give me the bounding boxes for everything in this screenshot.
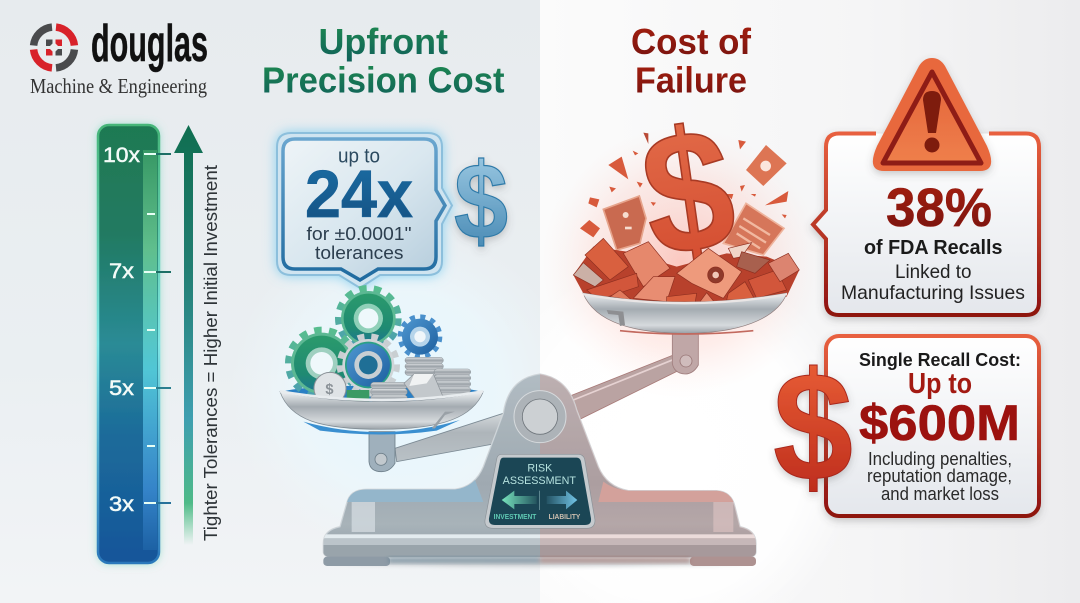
flying shards (580, 133, 788, 237)
illustration: shattered dollar and rubble (573, 90, 799, 307)
pivot knob (514, 391, 566, 443)
cracked dollar sign: $ (631, 90, 745, 294)
callout: up to 24x: 24x (305, 157, 413, 232)
heading: Upfront Precision Cost (262, 21, 505, 100)
gear: green top (339, 289, 398, 348)
heading: Upfront Precision Cost: Upfront (318, 21, 448, 62)
rubble pile (573, 238, 799, 307)
label: 3x: 3x (109, 493, 135, 516)
callout: 38% of FDA recalls: Manufacturing Issues (841, 282, 1025, 304)
logo: Douglas Machine & Engineering (30, 15, 208, 98)
callout: 38% of FDA recalls (813, 134, 1039, 315)
plaque: risk assessment (485, 454, 595, 528)
label: 5x: 5x (109, 377, 135, 400)
callout: single recall cost: Up to (908, 368, 972, 400)
logo wordmark: douglas (91, 15, 208, 73)
callout: up to 24x: tolerances (315, 242, 404, 263)
coin stacks and ingot: $ (325, 382, 333, 398)
callout: single recall cost: $600M (859, 395, 1020, 451)
icon: blue dollar sign: $ (454, 140, 508, 261)
callout: single recall cost: Including penalties, (868, 449, 1012, 469)
arrow: rising investment (174, 125, 203, 545)
callout: up to 24x: up to (338, 144, 380, 168)
plaque: risk assessment: LIABILITY (549, 514, 581, 521)
icon: logo ring (34, 27, 74, 68)
right pan stem (672, 333, 698, 374)
back document right (723, 203, 784, 255)
machine base and fulcrum (323, 374, 756, 557)
right pan (583, 293, 787, 334)
icon: warning triangle (873, 58, 991, 171)
heading: Upfront Precision Cost: Precision Cost (262, 60, 505, 100)
machine feet (323, 557, 756, 566)
callout: single recall cost: Single Recall Cost: (859, 350, 1021, 370)
scale: balance machine (280, 289, 757, 567)
gear: green large (289, 331, 354, 396)
gear: silver with blue core (340, 337, 396, 393)
plaque: risk assessment: RISK (527, 463, 552, 475)
callout: 38% of FDA recalls: 38% (886, 178, 992, 238)
left pan bowl (280, 392, 483, 429)
callout: single recall cost (826, 336, 1039, 516)
chart: tolerance cost multiplier gauge (98, 125, 171, 563)
right beam (568, 355, 678, 420)
plaque: risk assessment: ASSESSMENT (503, 475, 576, 487)
coin stacks and ingot (314, 357, 471, 404)
label: 10x: 10x (103, 144, 141, 167)
heading: Cost of Failure (631, 21, 752, 100)
callout: single recall cost: reputation damage, (867, 466, 1012, 486)
heading: Cost of Failure: Cost of (631, 21, 752, 62)
callout: 38% of FDA recalls: of FDA Recalls (864, 237, 1002, 259)
callout: up to 24x: for ±0.0001" (306, 223, 412, 244)
callout: single recall cost: and market loss (881, 484, 999, 504)
callout: up to 24x (277, 133, 452, 288)
left beam (395, 413, 503, 462)
icon: red dollar sign: $ (773, 340, 853, 513)
heading: Cost of Failure: Failure (635, 60, 747, 100)
back tile left (603, 196, 646, 250)
left pan stem (369, 432, 395, 472)
plaque: risk assessment: INVESTMENT (494, 514, 537, 521)
left pan lining (303, 420, 460, 434)
callout: 38% of FDA recalls: Linked to (895, 261, 972, 283)
gear: blue small (401, 317, 439, 356)
text: vertical axis caption: Tighter Tolerances = Higher Initial Investment (200, 165, 221, 541)
label: 7x: 7x (109, 260, 135, 283)
logo tagline: Machine & Engineering (30, 74, 207, 98)
ground shadow (330, 557, 750, 566)
